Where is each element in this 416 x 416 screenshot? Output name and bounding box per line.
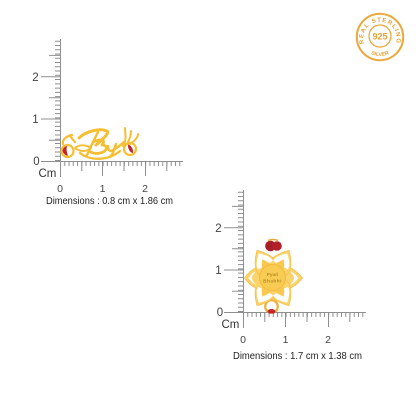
chart 1: ruler with name pendant — [32, 39, 183, 207]
y axis labels: 1 — [215, 265, 222, 277]
pendant: script name with red stones — [62, 128, 138, 159]
x axis labels — [57, 183, 148, 195]
engraved disc — [260, 264, 286, 290]
x axis labels: 0 — [240, 334, 246, 346]
top red bead — [265, 240, 282, 251]
pendant: flower with engraved disc — [244, 240, 302, 314]
flower petals — [244, 245, 302, 311]
chart 2: ruler with flower pendant — [215, 190, 366, 362]
red stones — [62, 144, 133, 156]
badge: real sterling silver 925 — [356, 12, 404, 62]
x axis labels: 1 — [100, 183, 106, 195]
y axis labels — [32, 72, 40, 168]
x axis labels: 2 — [325, 334, 331, 346]
dimensions caption 1: Dimensions : 0.8 cm x 1.86 cm — [46, 196, 173, 207]
x axis labels: 2 — [142, 183, 148, 195]
badge: real sterling silver 925: SILVER — [372, 51, 389, 56]
engraved disc: Pyari — [267, 272, 278, 278]
x axis labels — [240, 334, 331, 346]
y axis labels: 2 — [215, 223, 222, 235]
ruler 1 — [41, 39, 183, 177]
dimensions caption 2: Dimensions : 1.7 cm x 1.38 cm — [233, 351, 362, 362]
y axis labels: 0 — [33, 156, 40, 168]
unit label: Cm — [38, 168, 56, 180]
y axis labels: 0 — [217, 307, 223, 319]
x axis labels: 0 — [57, 183, 63, 195]
badge: real sterling silver 925: 925 — [372, 32, 388, 42]
ruler 2 — [224, 190, 366, 328]
engraved disc: Bhabhi — [263, 278, 282, 284]
petal cut-outs with inner leaves — [248, 249, 298, 307]
x axis labels: 1 — [283, 334, 289, 346]
y axis labels: 2 — [32, 72, 39, 84]
y axis labels — [215, 223, 223, 319]
badge: real sterling silver 925: REAL STERLING — [359, 18, 401, 44]
bottom ring with red stone — [265, 300, 278, 314]
unit label: Cm — [222, 319, 239, 331]
y axis labels: 1 — [32, 114, 39, 126]
